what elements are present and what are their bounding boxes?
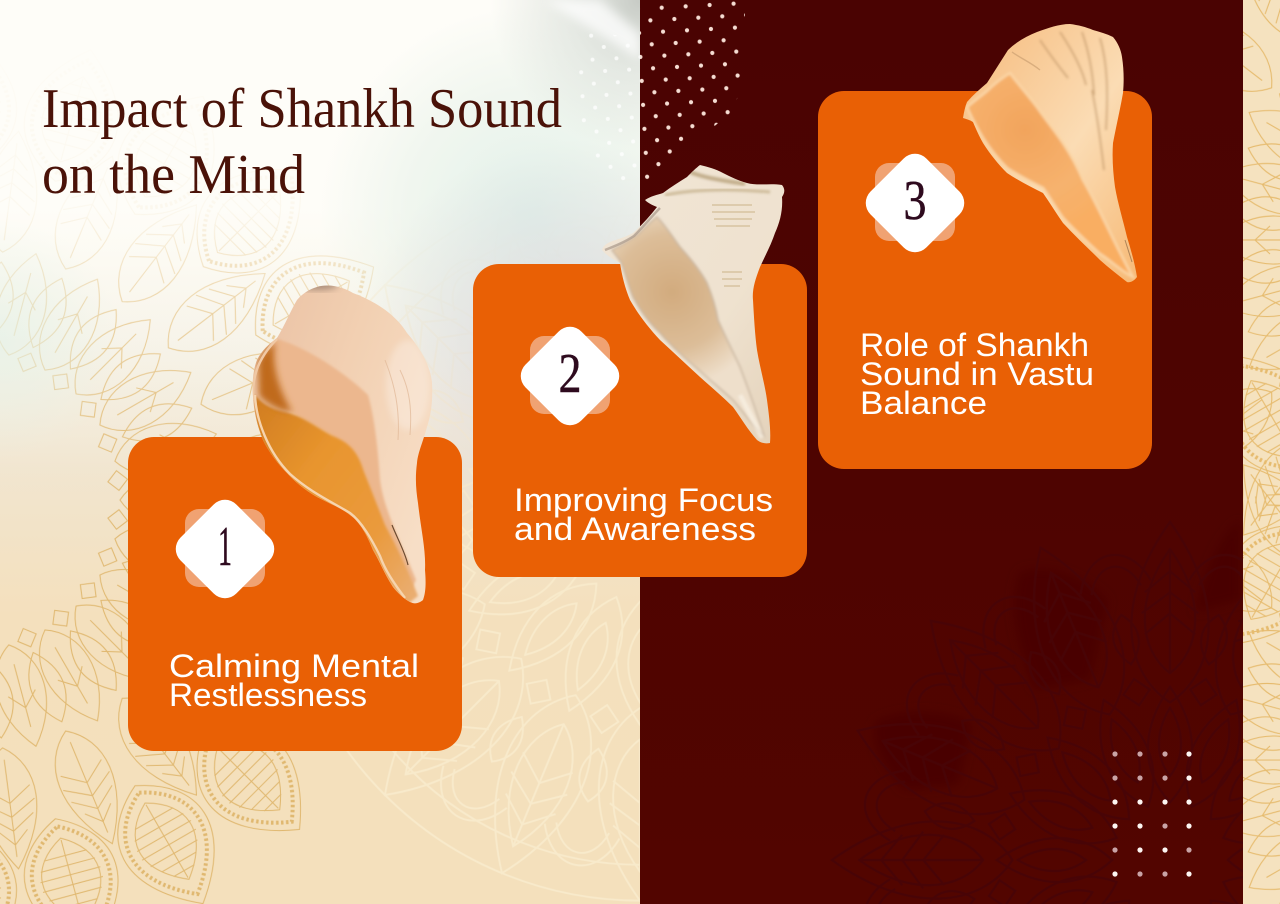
badge 2 xyxy=(514,320,626,432)
card 2 label: Improving Focus xyxy=(514,482,773,518)
icon: shell 2 xyxy=(602,165,784,444)
badge 2: 2 xyxy=(558,343,582,405)
card 3 label: Sound in Vastu xyxy=(860,356,1094,392)
badge 1: 1 xyxy=(218,516,232,578)
card 1 label: Calming Mental xyxy=(169,648,419,684)
card 2 label: and Awareness xyxy=(514,511,756,547)
icon: shell 3 xyxy=(963,24,1137,282)
card 2 label xyxy=(514,482,773,547)
card 3 label: Balance xyxy=(860,385,987,421)
panel: card 2 xyxy=(473,264,807,577)
card 1 label xyxy=(169,648,419,713)
badge 3 xyxy=(859,147,971,259)
title: Impact of Shankh Sound xyxy=(42,78,562,140)
icon: shell 1 xyxy=(252,286,432,604)
card 3 label: Role of Shankh xyxy=(860,327,1089,363)
dot grid: bottom right xyxy=(1112,751,1192,877)
panel: card 1 xyxy=(128,437,462,751)
badge 1 xyxy=(169,493,281,605)
panel: light left background xyxy=(0,0,640,904)
card 3 label xyxy=(860,327,1094,421)
panel: dark right background xyxy=(640,0,1243,904)
title xyxy=(42,78,562,206)
dot pattern: top centre xyxy=(570,0,746,185)
panel: card 3 xyxy=(818,91,1152,469)
dark mandala xyxy=(640,480,1243,904)
panel: decorative right strip xyxy=(1243,0,1280,904)
badge 3: 3 xyxy=(904,170,926,232)
card 1 label: Restlessness xyxy=(169,677,367,713)
title: on the Mind xyxy=(42,144,305,206)
